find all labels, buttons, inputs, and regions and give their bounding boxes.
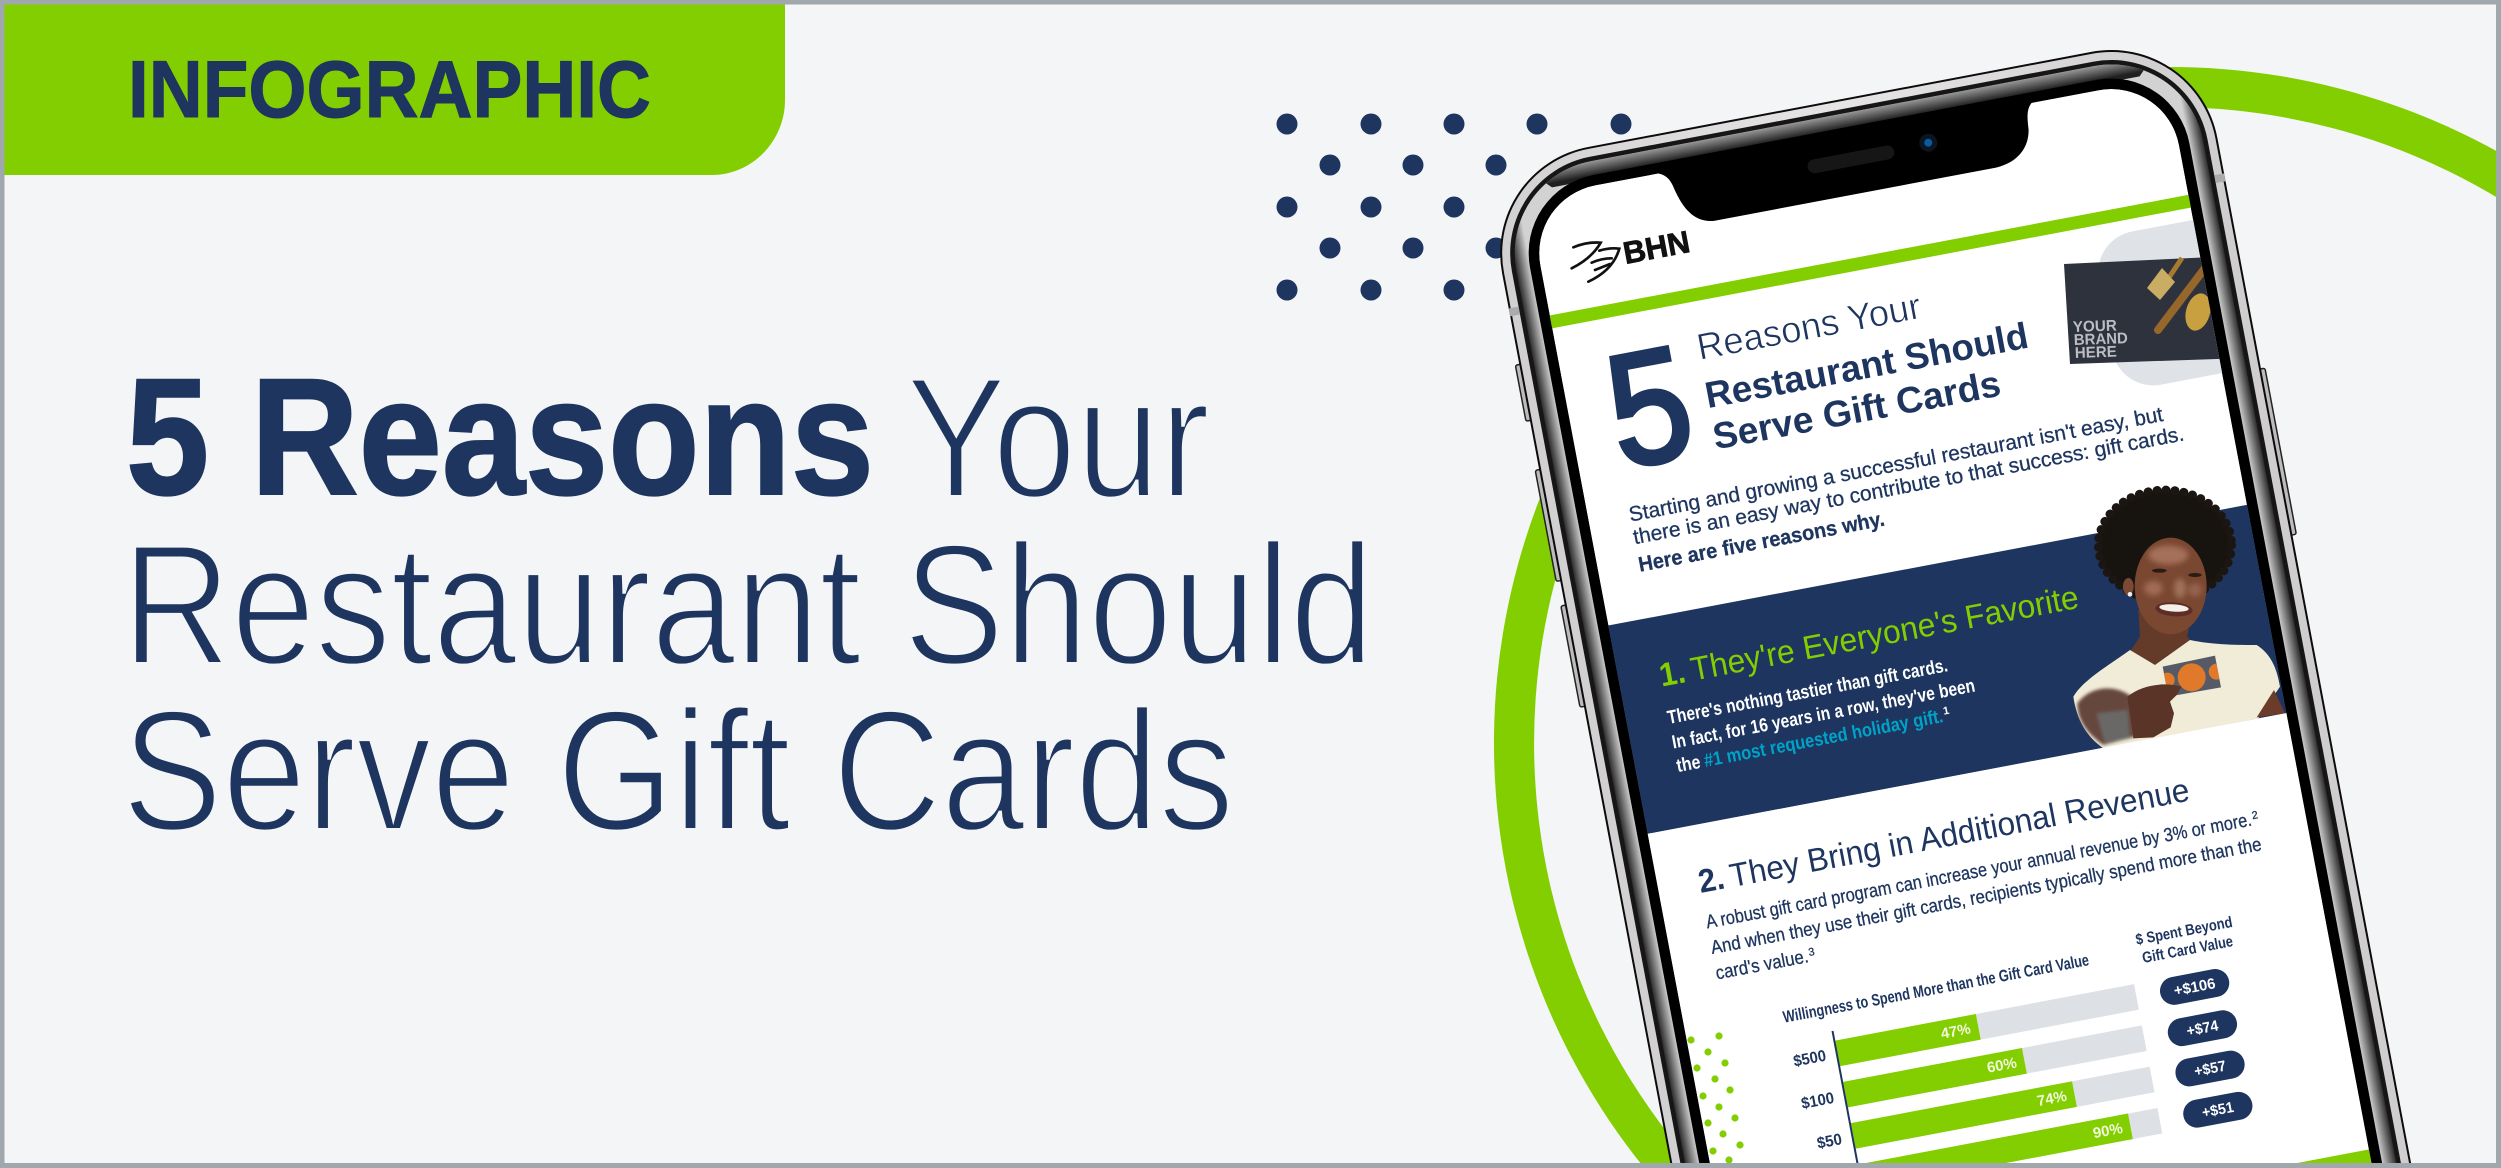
axis: [1832, 1031, 1858, 1166]
badge: infographic: [4, 4, 785, 175]
phone screen: [1539, 89, 2385, 1167]
headline: Your: [906, 342, 1210, 534]
camera: [1918, 132, 1939, 153]
right column heading: $ Spent Beyond: [2134, 914, 2234, 949]
dot pattern: [1276, 114, 1632, 300]
screen title: Restaurant Should: [1702, 315, 2032, 416]
right column heading: Gift Card Value: [2141, 933, 2235, 967]
photo: woman holding gift card: [2073, 490, 2285, 748]
bar percentages: 90%: [2092, 1120, 2124, 1142]
big number 5: 5: [1593, 311, 1705, 502]
headline: Serve Gift Cards: [122, 675, 1234, 867]
navy band: reason 1: [1599, 503, 2297, 836]
reason 1 heading: They're Everyone's Favorite: [1687, 578, 2082, 688]
gift card backdrop: [2100, 220, 2222, 386]
reason 2 panel: [1639, 711, 2385, 1167]
right column heading: [2136, 916, 2233, 962]
value pills: +$51: [2201, 1099, 2235, 1122]
bar percentages: 60%: [1986, 1054, 2018, 1077]
intro text: there is an easy way to contribute to that success: gift cards.: [1631, 423, 2186, 549]
bar chart: willingness to spend: [1782, 951, 2162, 1167]
spoon: [2185, 293, 2210, 331]
reason 1 heading: 1.: [1656, 652, 1688, 694]
reason 2 heading: They Bring in Additional Revenue: [1726, 771, 2192, 894]
reason 2 text: 3: [1808, 946, 1816, 959]
right arm: [2257, 690, 2285, 717]
reason 1 text: [1666, 655, 1977, 777]
bar tracks: [1835, 984, 2162, 1167]
green divider: [1541, 193, 2202, 330]
knife: [2158, 268, 2205, 330]
speaker: [1806, 144, 1896, 174]
face: [2135, 538, 2207, 634]
mini gift card: [2162, 656, 2221, 696]
screen title: Reasons Your: [1693, 285, 1924, 368]
screen title: Serve Gift Cards: [1709, 363, 2004, 457]
badge: infographic: INFOGRAPHIC: [128, 45, 651, 135]
hand: [2127, 684, 2182, 738]
value pills: +$74: [2185, 1017, 2220, 1040]
reason 2 text: card's value.: [1714, 946, 1810, 984]
bar percentages: [1939, 1020, 2124, 1142]
screen background: [1539, 89, 2372, 1167]
axis labels: $500: [1792, 1048, 1828, 1071]
bar percentages: 74%: [2036, 1088, 2068, 1110]
headline: 5 Reasons: [126, 345, 874, 530]
phone notch: [1654, 99, 2046, 230]
shirt: [2073, 640, 2280, 748]
reason 1 text: the: [1675, 752, 1702, 777]
reason 2 heading: 2.: [1695, 859, 1727, 900]
forearm: [2077, 688, 2135, 745]
reason 1 text: #1 most requested holiday gift.: [1702, 706, 1945, 772]
reason 2 text: And when they use their gift cards, recipients typically spend more than the: [1709, 834, 2263, 959]
bar fills: [1835, 1014, 2133, 1167]
headline: Restaurant Should: [122, 509, 1374, 701]
axis labels: $50: [1816, 1131, 1844, 1153]
screen title: [1698, 298, 2028, 448]
gift card image: [2064, 256, 2220, 364]
bottom green strip: [2276, 1147, 2385, 1167]
reason 1 text: 1: [1942, 705, 1950, 718]
reason 1 text: There's nothing tastier than gift cards.: [1666, 655, 1950, 729]
hair: [2098, 490, 2232, 600]
BHN wordmark: BHN: [1620, 224, 1693, 271]
reason 2 text: 2: [2251, 809, 2259, 822]
green dot pattern on screen: [1687, 1032, 1744, 1164]
side buttons: [1515, 364, 2296, 707]
value pills: [2158, 967, 2255, 1130]
card text: [2073, 320, 2128, 358]
card text: HERE: [2075, 344, 2117, 362]
headline: [122, 342, 1374, 867]
card text: YOUR: [2073, 317, 2117, 336]
neck: [2130, 610, 2190, 665]
card text: BRAND: [2074, 330, 2128, 349]
reason 1 text: In fact, for 16 years in a row, they've been: [1670, 676, 1977, 754]
axis labels: [1794, 1050, 1842, 1150]
fork: [2166, 258, 2182, 282]
ear: [2123, 578, 2134, 595]
antenna bands: [1509, 173, 2226, 316]
reason 2 text: A robust gift card program can increase your annual revenue by 3% or more.: [1704, 810, 2254, 933]
value pills: +$57: [2193, 1058, 2227, 1080]
bezel rings: [1500, 49, 2412, 1167]
value pills: +$106: [2173, 975, 2217, 1000]
intro text: Here are five reasons why.: [1637, 508, 1886, 577]
chart title: Willingness to Spend More than the Gift Card Value: [1782, 951, 2090, 1027]
bar percentages: 47%: [1939, 1020, 1972, 1043]
intro text: Starting and growing a successful restaurant isn't easy, but: [1627, 403, 2165, 527]
green ring behind phone: [1494, 67, 2500, 1167]
logo: BHN swoosh: [1572, 243, 1619, 282]
axis labels: $100: [1800, 1090, 1836, 1113]
